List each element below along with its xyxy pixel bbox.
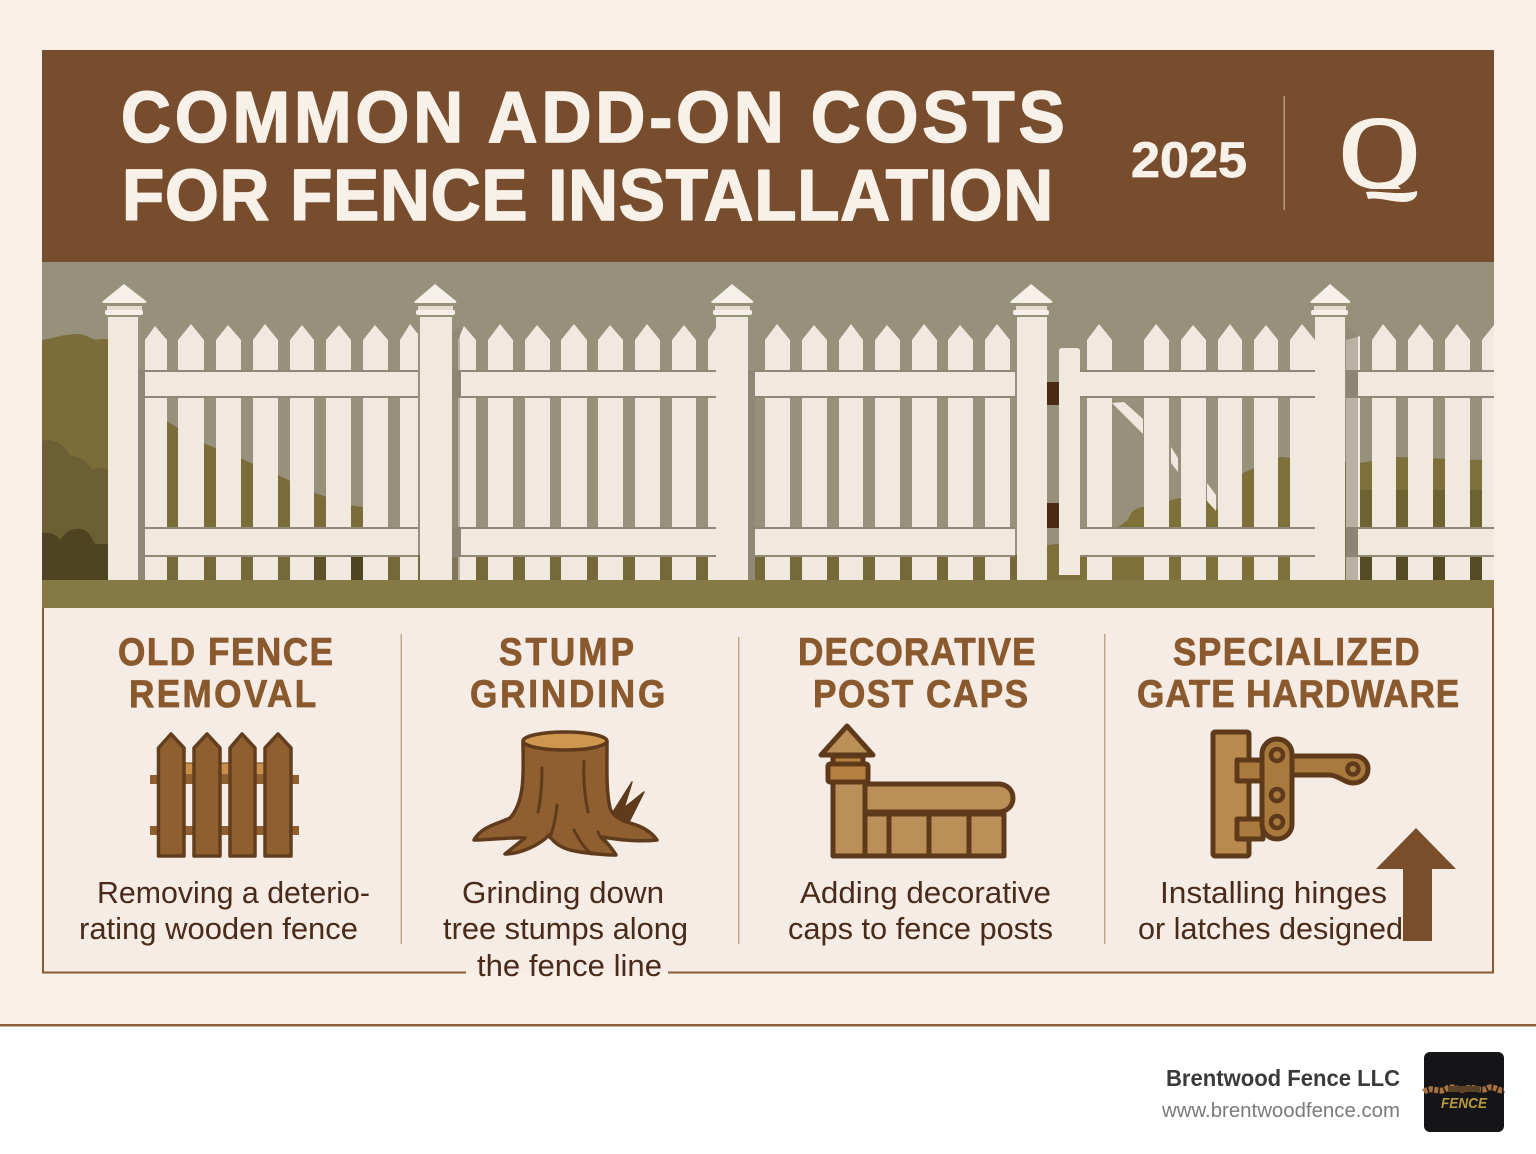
background hills	[42, 334, 1494, 580]
logo mark: Q	[1342, 118, 1418, 202]
heading	[1137, 629, 1459, 715]
heading: REMOVAL	[129, 671, 316, 715]
description: Installing hinges	[1160, 875, 1387, 910]
post 5	[1310, 284, 1350, 580]
description: or latches designed	[1138, 911, 1403, 946]
heading	[470, 629, 665, 715]
gate stile	[1059, 348, 1080, 575]
icon: gate hinge	[1213, 732, 1368, 856]
logo mark: Q: Q	[1340, 97, 1419, 210]
description: Adding decorative	[800, 875, 1051, 910]
heading	[798, 629, 1036, 715]
add-ons panel frame	[42, 608, 1494, 973]
description: tree stumps along	[443, 911, 688, 946]
description: rating wooden fence	[79, 911, 358, 946]
icon: tree stump	[474, 732, 657, 855]
heading: OLD FENCE	[118, 629, 333, 673]
fence posts with caps	[102, 284, 1350, 580]
footer	[0, 1024, 1536, 1154]
heading: STUMP	[499, 629, 634, 673]
heading: DECORATIVE	[798, 629, 1036, 673]
company logo: FENCE	[1441, 1095, 1488, 1112]
fence rails	[145, 372, 1494, 555]
description	[443, 875, 688, 983]
icon: wooden fence	[150, 734, 299, 856]
description	[79, 875, 370, 946]
description	[788, 875, 1053, 946]
heading	[118, 629, 333, 715]
title: FOR FENCE INSTALLATION	[122, 155, 1053, 235]
header banner	[42, 50, 1494, 262]
post 1	[102, 284, 146, 580]
description: Removing a deterio-	[97, 875, 370, 910]
panel: stump grinding	[443, 629, 688, 983]
post 3	[711, 284, 753, 580]
panel: old fence removal	[79, 629, 370, 946]
description: caps to fence posts	[788, 911, 1053, 946]
pickets	[145, 324, 1494, 580]
gate hinges	[1047, 382, 1059, 528]
description	[1138, 875, 1403, 946]
title	[121, 77, 1065, 235]
ground strip	[42, 580, 1494, 608]
translucent post shadows	[452, 325, 1358, 580]
post cast shadows	[138, 421, 755, 580]
icon: post cap and fence	[821, 726, 1013, 856]
year: 2025	[1131, 132, 1247, 188]
post 4	[1010, 284, 1052, 580]
panel: specialized gate hardware	[1137, 629, 1459, 946]
panel: decorative post caps	[788, 629, 1053, 946]
title: COMMON ADD-ON COSTS	[121, 77, 1065, 157]
company name: Brentwood Fence LLC	[1166, 1065, 1400, 1091]
website: www.brentwoodfence.com	[1161, 1100, 1400, 1122]
heading: POST CAPS	[813, 671, 1028, 715]
fence scene illustration	[42, 262, 1494, 608]
heading: GRINDING	[470, 671, 665, 715]
rail shadows	[145, 370, 1494, 557]
description: the fence line	[477, 948, 662, 983]
arrow: up	[1376, 828, 1456, 941]
gate diagonal brace	[1112, 402, 1216, 511]
company logo	[1424, 1052, 1504, 1132]
description: Grinding down	[462, 875, 664, 910]
heading: SPECIALIZED	[1173, 629, 1420, 673]
post 2	[414, 284, 456, 580]
heading: GATE HARDWARE	[1137, 671, 1459, 715]
